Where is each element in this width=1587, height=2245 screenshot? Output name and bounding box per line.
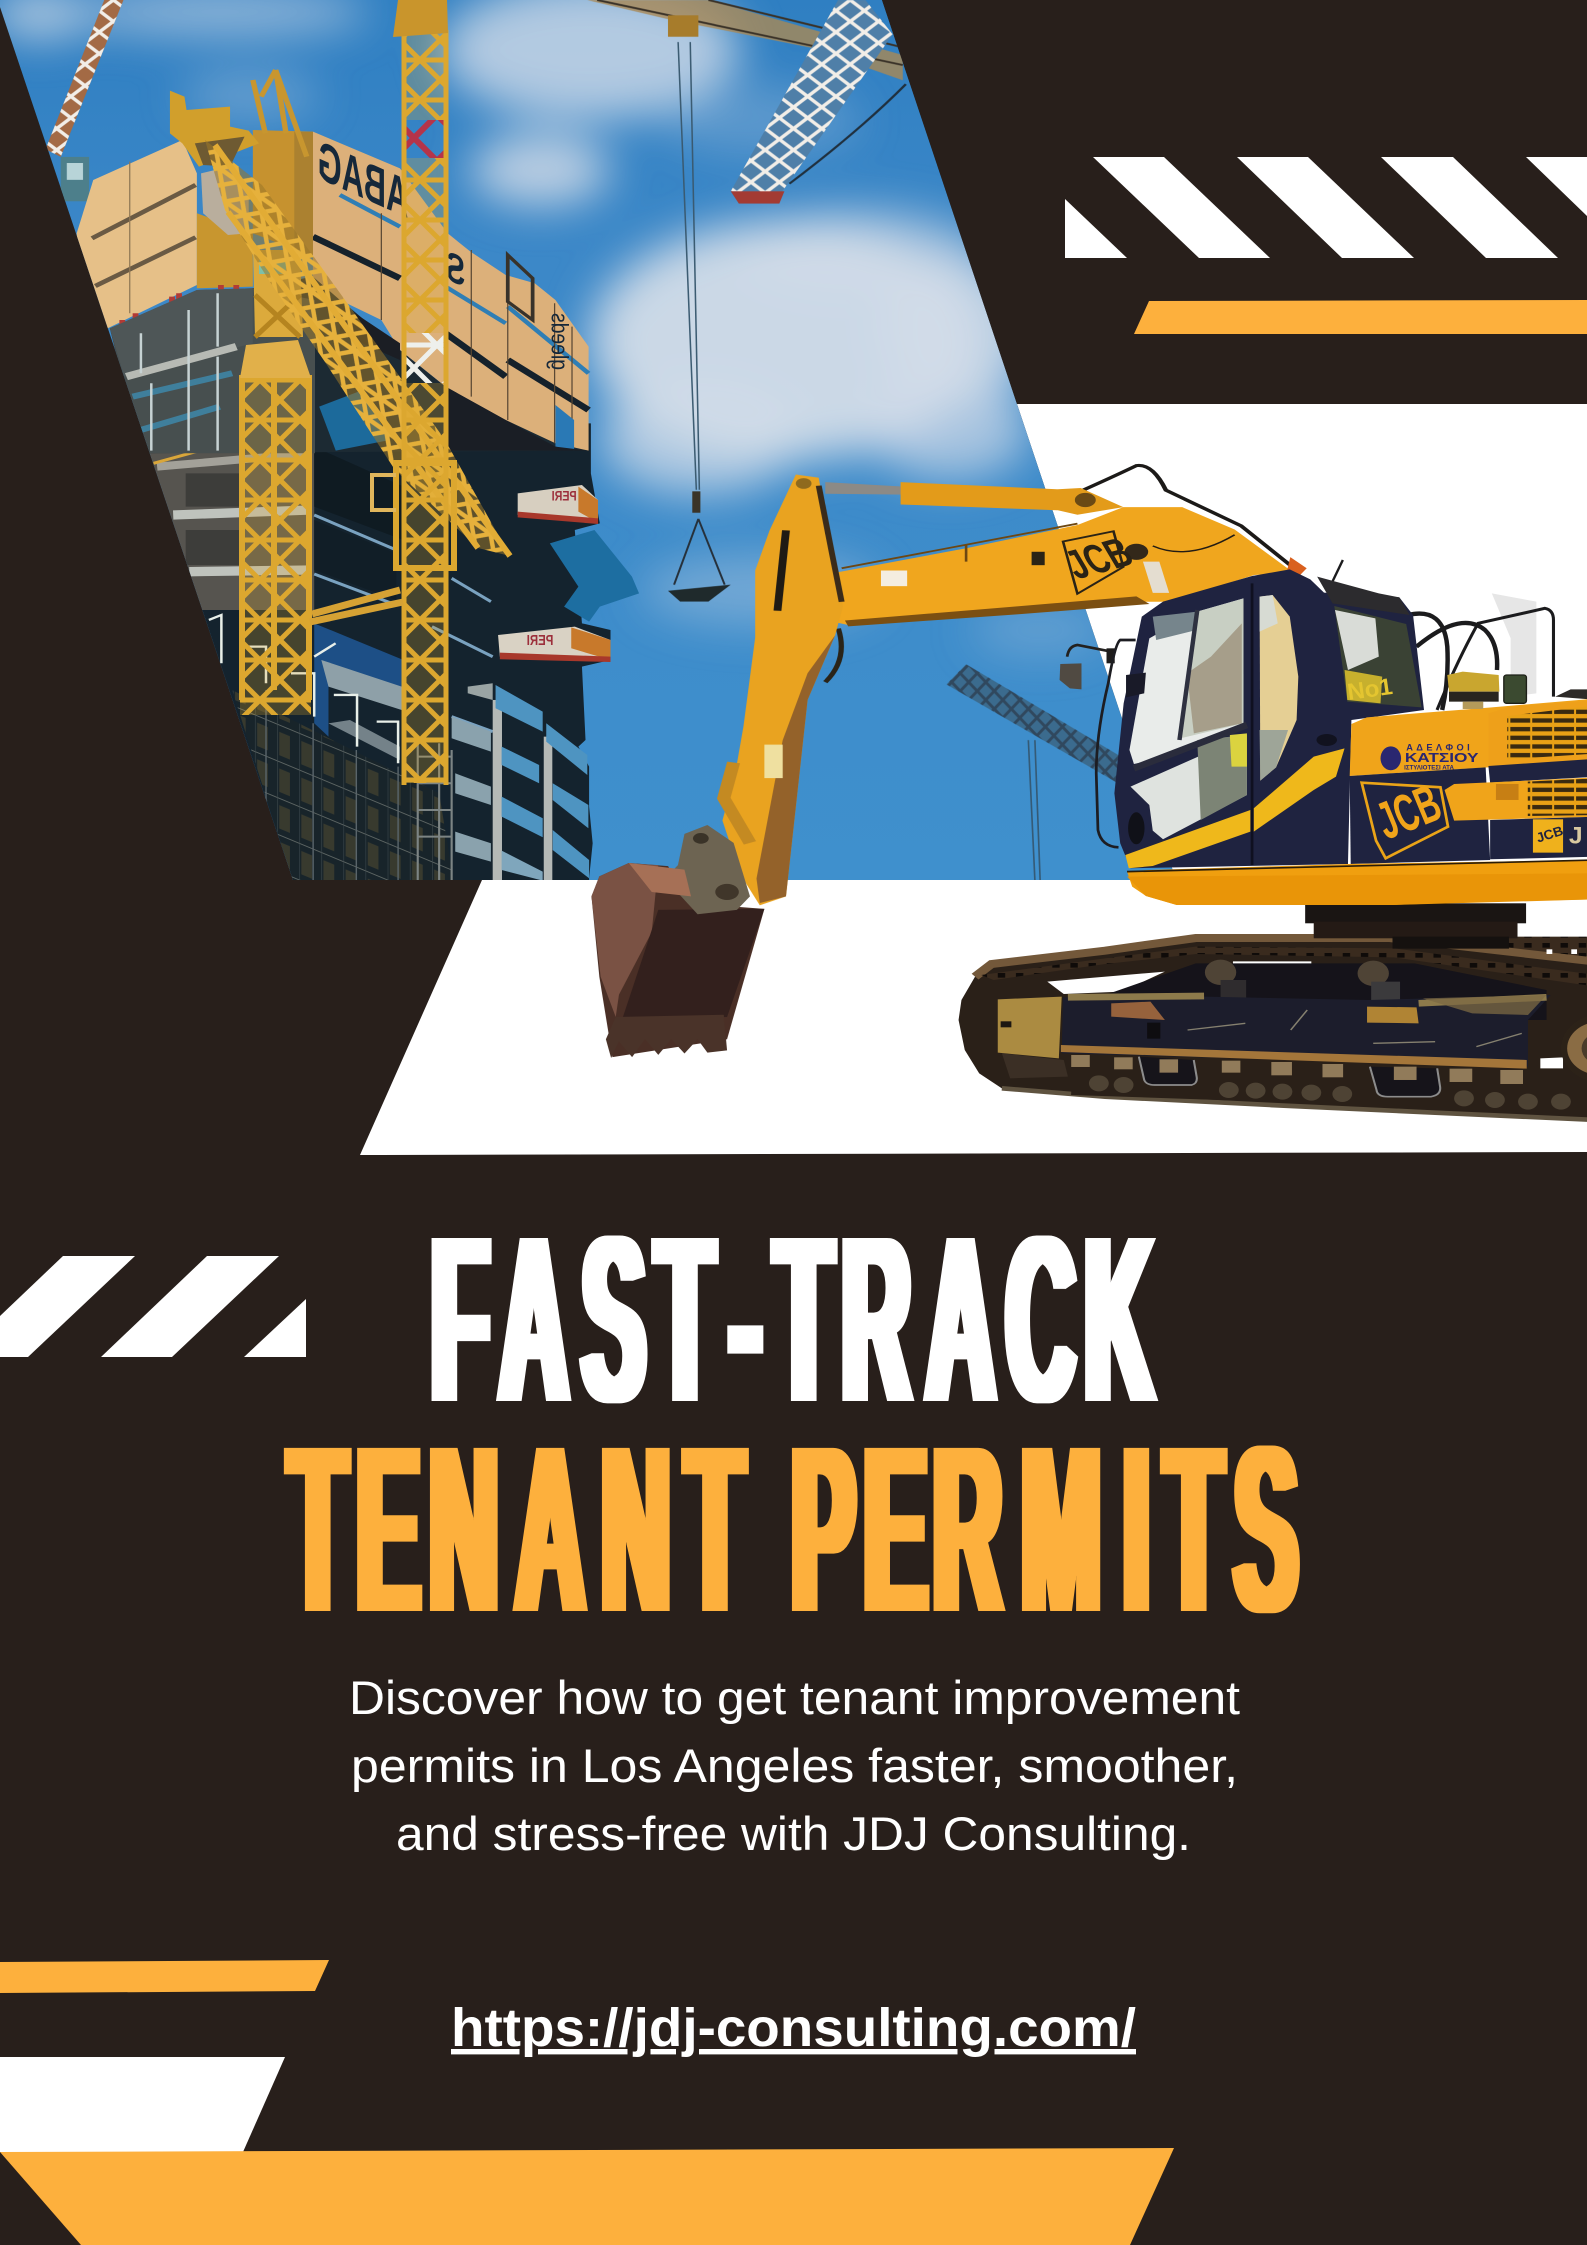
track gaps — [1047, 972, 1165, 994]
boom pin — [1125, 544, 1148, 560]
glazing — [496, 685, 543, 732]
chalky cab roof — [1317, 577, 1410, 615]
left concrete storeys — [110, 288, 315, 453]
lower track rollers — [1071, 1077, 1587, 1113]
clouds — [0, 0, 1110, 656]
boom decal — [881, 571, 907, 586]
red fixings under cladding — [122, 285, 236, 337]
balcony: PERI lower: PERI — [527, 632, 553, 648]
dealer decal: ΑΔΕΛΦΟΙ — [1406, 743, 1473, 753]
decoration: white hazard stripes top right — [1065, 157, 1587, 258]
guard loops — [1139, 1057, 1440, 1097]
structure backing under cladding — [110, 278, 513, 454]
blue hoarding — [314, 623, 403, 737]
white scaffold frames — [209, 615, 398, 763]
excavator: ghost bracket — [1492, 593, 1536, 697]
description text — [349, 1671, 1240, 1860]
crane: left yellow tower — [240, 250, 311, 715]
decoration: orange bar top right — [1134, 300, 1587, 334]
sky — [0, 0, 1200, 880]
navy track frame — [1062, 995, 1551, 1067]
cab door side glass — [1260, 595, 1298, 781]
right side columns — [493, 700, 502, 881]
left cladding block — [77, 140, 197, 328]
signage mirrored letter S: S — [446, 242, 465, 296]
crane: main diagonal boom — [205, 140, 510, 556]
rust brackets — [1111, 1002, 1165, 1020]
crane operator head — [170, 91, 259, 167]
panel: top right corner block — [882, 0, 1587, 404]
crane: tall yellow tower — [310, 0, 454, 785]
rear window sticker: No1 — [1346, 674, 1394, 706]
small JCB decal: J — [1569, 823, 1583, 849]
balcony: PERI upper: PERI — [552, 488, 577, 504]
cab door windows — [1129, 598, 1244, 764]
rear window — [1334, 606, 1422, 707]
excavator: dipper arm — [722, 475, 843, 905]
decoration: white hazard stripes left — [0, 1256, 306, 1357]
title: FAST-TRACK: FAST-TRACK — [431, 1188, 1153, 1452]
crane: left background tower crane — [46, 0, 123, 201]
hanging counterweight — [201, 165, 249, 235]
beacon and small mirror — [1447, 672, 1587, 709]
excavator: slew ring — [1305, 903, 1526, 949]
small JCB decal — [1533, 819, 1583, 853]
engine vents — [1507, 705, 1587, 759]
sign frame — [508, 255, 533, 320]
hoist scaffold at tower foot — [418, 743, 452, 881]
hoist cable and load — [668, 42, 731, 602]
hydraulic ram — [825, 482, 1123, 515]
description text: permits in Los Angeles faster, smoother, — [351, 1739, 1238, 1792]
crane: top right jib and white jib — [587, 0, 906, 602]
balcony: PERI lower — [498, 627, 611, 662]
excavator: rear track and drive sprocket — [959, 936, 1587, 1120]
website link: https://jdj-consulting.com/ — [451, 1998, 1136, 2058]
muddy end plate — [998, 997, 1062, 1058]
balcony: PERI upper — [518, 485, 598, 524]
concrete upper left floors — [150, 453, 314, 610]
crane: distant crane behind excavator — [946, 664, 1123, 880]
side mirror — [1060, 640, 1136, 847]
skirt — [1127, 860, 1587, 905]
description text: and stress-free with JDJ Consulting. — [396, 1807, 1191, 1860]
panel: construction site photo — [0, 0, 1200, 881]
building: lower floors — [100, 423, 639, 881]
small JCB decal: JCB — [1534, 823, 1565, 845]
illustration: JCB excavator — [591, 465, 1587, 1120]
crane A-frame — [253, 70, 307, 157]
drive sprocket — [1561, 1013, 1587, 1083]
roller brackets — [1071, 1055, 1523, 1084]
track frame rust strip — [1061, 1045, 1527, 1069]
excavator: cab — [1060, 569, 1424, 868]
excavator: hoses and rear rail — [1408, 608, 1553, 710]
top rollers — [1205, 960, 1236, 985]
boom badge: JCB — [1057, 530, 1142, 588]
antenna — [1328, 560, 1343, 591]
navy belly panel — [1350, 767, 1490, 864]
building: upper cladding panels — [77, 70, 589, 453]
decoration: white bar bottom left — [0, 2057, 285, 2152]
signage mirrored ABAG: ABAG — [318, 128, 408, 230]
cab yellow stripe — [1125, 810, 1250, 868]
panel: white backdrop behind excavator — [360, 404, 1587, 1155]
description text: Discover how to get tenant improvement — [349, 1671, 1240, 1724]
dealer decal: ΙΣΤΥΛΙΟΤΕΣΙ ΑΤΑ — [1404, 764, 1455, 771]
lower window grid — [232, 690, 453, 881]
title: TENANT PERMITS: TENANT PERMITS — [289, 1398, 1298, 1662]
signage mirrored name: gleeds — [546, 313, 573, 370]
dealer decal: ΚΑΤΣΙΟΥ — [1405, 750, 1478, 765]
protective netting — [550, 530, 639, 622]
excavator: main boom — [802, 465, 1307, 626]
body JCB logo: JCB — [1369, 774, 1449, 851]
upper dark frame — [1105, 963, 1547, 1020]
dealer decal — [1381, 743, 1478, 771]
right curved cladding — [313, 132, 589, 451]
decoration: orange bar bottom left — [0, 1960, 329, 1993]
decoration: large orange bar bottom — [0, 2148, 1174, 2245]
crane mast panel — [253, 130, 313, 257]
excavator: bucket — [591, 825, 764, 1058]
concrete slab and scaffold below cladding — [110, 288, 253, 377]
cab round light — [1128, 812, 1145, 844]
excavator: engine body — [1127, 560, 1587, 905]
